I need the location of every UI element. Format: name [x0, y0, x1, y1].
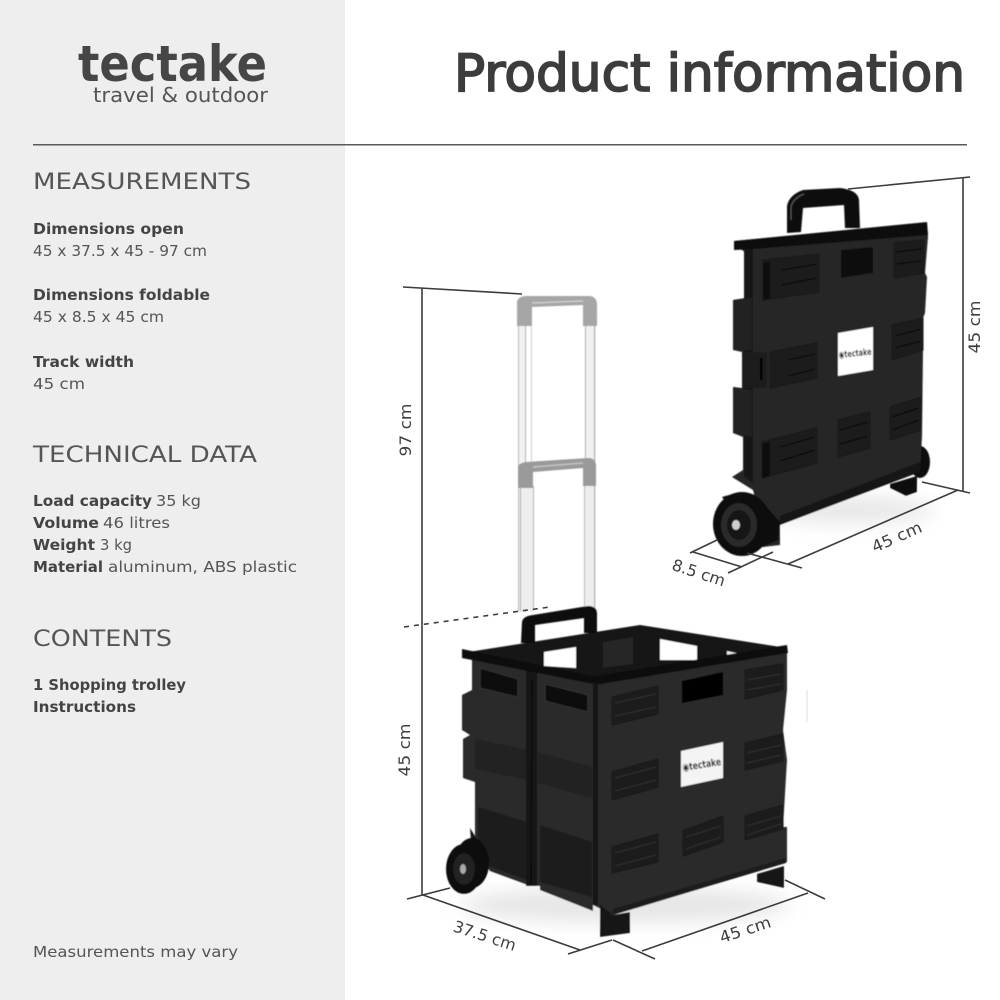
section: technical data: TECHNICAL DATA	[32, 443, 257, 468]
label: 8.5 cm: 8.5 cm	[670, 555, 728, 590]
label: 45 cm height: 45 cm	[965, 300, 984, 354]
ground shadow	[460, 887, 790, 923]
section: technical data: Volume	[33, 514, 99, 532]
section: technical data: 3 kg	[100, 536, 132, 554]
section: technical data: 35 kg	[156, 492, 201, 510]
logo: tectake travel & outdoor: travel & outdoor	[93, 83, 269, 107]
handle	[787, 188, 860, 233]
back wheel	[910, 446, 930, 478]
label: 45 cm width: 45 cm	[717, 913, 773, 947]
section: technical data: Material	[33, 558, 103, 576]
section: technical data	[32, 443, 297, 576]
section: measurements: 45 x 37.5 x 45 - 97 cm	[33, 242, 207, 260]
interior	[462, 625, 787, 682]
label: 37.5 cm: 37.5 cm	[451, 917, 519, 955]
section: technical data: Weight	[33, 536, 96, 554]
right face	[590, 645, 788, 915]
header divider	[33, 144, 967, 146]
feet	[757, 866, 784, 888]
body	[732, 222, 928, 547]
wheel	[713, 492, 780, 556]
product: folded trolley	[713, 188, 935, 556]
section: technical data: aluminum, ABS plastic	[108, 558, 297, 576]
base strip	[780, 462, 920, 525]
product: open trolley	[446, 296, 790, 937]
section: technical data: Load capacity	[33, 492, 152, 510]
section: measurements: Dimensions open	[33, 220, 184, 238]
right face: ◉tectake	[682, 757, 722, 774]
section: measurements: 45 cm	[33, 375, 85, 393]
section: measurements: Track width	[33, 353, 134, 371]
label	[838, 327, 873, 376]
section: contents: 1 Shopping trolley	[33, 676, 186, 694]
label: 97 cm: 97 cm	[396, 404, 415, 456]
section: contents: CONTENTS	[33, 627, 172, 652]
dimensions: folded trolley	[670, 177, 984, 590]
section: measurements: 45 x 8.5 x 45 cm	[33, 308, 164, 326]
wheel	[446, 828, 490, 894]
section: measurements	[33, 170, 251, 393]
label	[681, 742, 723, 787]
left face	[462, 649, 593, 911]
footnote: Measurements may vary	[33, 943, 238, 961]
section: measurements: Dimensions foldable	[33, 286, 210, 304]
recess panels	[612, 686, 658, 725]
logo: tectake travel & outdoor: tectake	[78, 35, 267, 93]
extended handle: top position	[517, 296, 597, 612]
section: technical data: 46 litres	[103, 514, 170, 532]
section: contents	[33, 627, 186, 716]
folded-down black handle	[521, 606, 597, 643]
ground shadow	[765, 496, 935, 524]
right foot	[890, 476, 917, 496]
label: 45 cm height: 45 cm	[395, 724, 414, 776]
dimensions: open trolley	[395, 287, 825, 959]
title: Product information	[454, 44, 965, 104]
faint artefact	[806, 690, 808, 722]
extended handle: middle position	[518, 458, 596, 611]
label: 45 cm width: 45 cm	[869, 518, 925, 556]
body: ◉tectake	[838, 348, 872, 361]
section: measurements: MEASUREMENTS	[33, 170, 251, 195]
recess panels	[763, 254, 819, 300]
panel: left sidebar	[0, 0, 345, 1000]
section: contents: Instructions	[33, 698, 136, 716]
